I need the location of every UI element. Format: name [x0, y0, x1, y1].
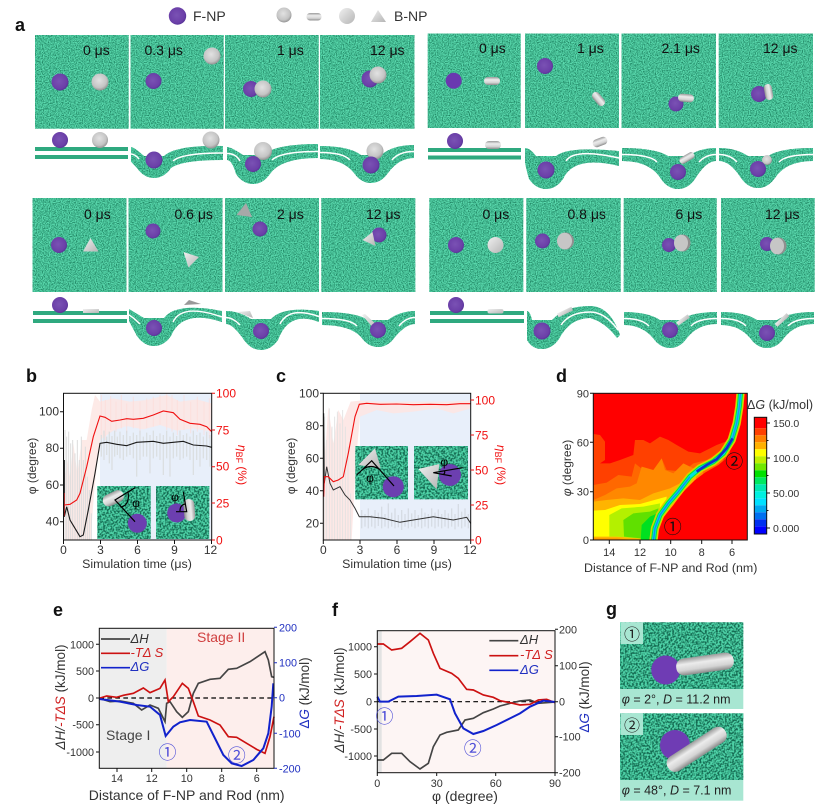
- legend: nanoparticle key: [169, 7, 427, 25]
- panel a: triangle series: 12 μs: [366, 206, 401, 222]
- chart b: phi and eta versus time: 25: [216, 496, 230, 510]
- chart c: phi and eta versus time: (%): [494, 463, 508, 485]
- panel a: rod series: 2.1 μs: [662, 40, 700, 56]
- panel a: triangle series: [32, 198, 415, 350]
- panel a: rod series: 12 μs: [763, 40, 798, 56]
- chart f: thermodynamics versus angle: -TΔ S: [520, 647, 553, 662]
- chart e: thermodynamics versus distance: 12: [146, 773, 158, 785]
- chart f: thermodynamics versus angle: ΔG (kJ/mol): [577, 661, 592, 733]
- chart f: thermodynamics versus angle: -100: [559, 732, 581, 744]
- panel a: disc series: 0.8 μs: [568, 206, 606, 222]
- chart c: phi and eta versus time: φ (degree): [284, 438, 298, 494]
- chart e: thermodynamics versus distance: 0: [279, 693, 285, 705]
- chart c: phi and eta versus time: 9: [431, 543, 438, 557]
- chart f: thermodynamics versus angle: ΔH: [519, 632, 539, 647]
- chart c: phi and eta versus time: 6: [394, 543, 401, 557]
- chart e: thermodynamics versus distance: 1000: [70, 639, 94, 651]
- chart c: phi and eta versus time: η: [494, 445, 508, 452]
- chart d: free energy contour map: 8: [699, 547, 705, 559]
- chart c: phi and eta versus time: 50: [475, 464, 489, 478]
- chart e: thermodynamics versus distance: 100: [279, 658, 297, 670]
- chart e: thermodynamics versus distance: 200: [279, 622, 297, 634]
- chart b: phi and eta versus time: 3: [97, 543, 104, 557]
- chart d: free energy contour map: 0: [583, 535, 589, 547]
- chart d: free energy contour map: [560, 388, 757, 575]
- panel a: triangle series: 2 μs: [277, 206, 304, 222]
- chart f: thermodynamics versus angle: ΔH/-TΔS (kJ/mol): [332, 647, 347, 754]
- chart f: thermodynamics versus angle: 0: [374, 778, 380, 790]
- chart e: thermodynamics versus distance: ΔH: [130, 631, 149, 646]
- panel a: sphere series: 0.3 μs: [144, 42, 183, 58]
- chart f: thermodynamics versus angle: 200: [559, 624, 577, 636]
- panel a: sphere series: 1 μs: [277, 42, 304, 58]
- chart c: phi and eta versus time: 100: [299, 386, 319, 400]
- chart c: phi and eta versus time: 75: [475, 428, 489, 442]
- panel a: disc series: 0 μs: [482, 206, 509, 222]
- snapshot: state 1: [620, 621, 743, 709]
- chart c: phi and eta versus time: 0: [475, 534, 482, 548]
- chart d: free energy contour map: ②: [725, 448, 743, 474]
- chart e: thermodynamics versus distance: ΔH/-TΔS (kJ/mol): [53, 644, 68, 751]
- chart f: thermodynamics versus angle: 0: [559, 697, 565, 709]
- chart e: thermodynamics versus distance: 0: [88, 693, 94, 705]
- chart f: thermodynamics versus angle: 60: [490, 778, 502, 790]
- chart b: phi and eta versus time: 12: [204, 543, 217, 557]
- snapshot: state 2: φ = 48°, D = 7.1 nm: [622, 784, 731, 798]
- chart b: phi and eta versus time: [25, 386, 249, 571]
- chart b: phi and eta versus time: 60: [46, 478, 59, 492]
- panel label a: a: [15, 15, 26, 35]
- legend: nanoparticle key: F-NP: [193, 8, 226, 24]
- chart b: phi and eta versus time: 80: [46, 441, 59, 455]
- panel a: sphere series: 12 μs: [370, 42, 405, 58]
- chart b: phi and eta versus time: (%): [235, 463, 249, 485]
- snapshot: state 2: ②: [624, 712, 640, 736]
- snapshot: state 2: [620, 712, 743, 801]
- chart f: thermodynamics versus angle: 90: [549, 778, 561, 790]
- chart f: thermodynamics versus angle: ②: [464, 735, 482, 761]
- colorbar: delta G scale: 150.0: [773, 418, 799, 430]
- chart e: thermodynamics versus distance: -200: [279, 763, 301, 775]
- panel a: rod series: 1 μs: [577, 40, 604, 56]
- inset: rod orientation angle, stage start: φ: [132, 496, 140, 510]
- chart c: phi and eta versus time: 80: [306, 419, 319, 433]
- colorbar: delta G scale: 0.000: [773, 523, 799, 535]
- chart e: thermodynamics versus distance: -100: [279, 728, 301, 740]
- chart e: thermodynamics versus distance: 6: [254, 773, 260, 785]
- panel a: sphere series: [35, 35, 414, 184]
- chart d: free energy contour map: Distance of F-NP and Rod (nm): [584, 561, 757, 575]
- inset: rod orientation angle, stage end: φ: [171, 490, 179, 504]
- chart f: thermodynamics versus angle: -200: [559, 768, 581, 780]
- chart c: phi and eta versus time: 40: [306, 484, 319, 498]
- chart e: thermodynamics versus distance: 14: [111, 773, 123, 785]
- panel label e: e: [53, 600, 63, 620]
- chart e: thermodynamics versus distance: ΔG (kJ/mol): [297, 657, 312, 729]
- chart e: thermodynamics versus distance: Stage II: [197, 629, 245, 645]
- chart e: thermodynamics versus distance: -500: [72, 720, 94, 732]
- chart e: thermodynamics versus distance: Distance of F-NP and Rod (nm): [89, 787, 285, 803]
- chart c: phi and eta versus time: 0: [320, 543, 327, 557]
- chart f: thermodynamics versus angle: ΔG: [519, 662, 539, 677]
- inset: triangle orientation angle, stage end: φ: [440, 455, 448, 469]
- chart e: thermodynamics versus distance: 500: [76, 666, 94, 678]
- chart b: phi and eta versus time: 50: [216, 460, 230, 474]
- chart f: thermodynamics versus angle: -1000: [344, 751, 372, 763]
- chart b: phi and eta versus time: 0: [60, 543, 67, 557]
- chart c: phi and eta versus time: 25: [475, 498, 489, 512]
- panel label d: d: [556, 366, 567, 386]
- chart d: free energy contour map: 30: [577, 486, 589, 498]
- chart c: phi and eta versus time: 3: [357, 543, 364, 557]
- inset: rod orientation angle, stage end: [156, 486, 209, 539]
- chart f: thermodynamics versus angle: ①: [376, 703, 394, 729]
- legend: nanoparticle key: B-NP: [394, 8, 427, 24]
- chart b: phi and eta versus time: 9: [171, 543, 178, 557]
- chart c: phi and eta versus time: 12: [463, 543, 477, 557]
- panel a: triangle series: 0 μs: [84, 206, 111, 222]
- chart e: thermodynamics versus distance: -1000: [66, 747, 94, 759]
- panel label b: b: [26, 366, 37, 386]
- chart e: thermodynamics versus distance: ②: [228, 742, 246, 768]
- inset: triangle orientation angle, stage end: [414, 446, 468, 499]
- panel label g: g: [606, 599, 617, 619]
- colorbar: delta G scale: 100.0: [773, 453, 799, 465]
- chart e: thermodynamics versus distance: Stage I: [106, 727, 150, 743]
- panel label c: c: [276, 366, 286, 386]
- chart f: thermodynamics versus angle: 1000: [348, 642, 372, 654]
- chart c: phi and eta versus time: [284, 386, 508, 571]
- chart c: phi and eta versus time: 100: [475, 394, 495, 408]
- colorbar: delta G scale: 50.00: [773, 488, 799, 500]
- chart c: phi and eta versus time: 60: [306, 452, 319, 466]
- chart b: phi and eta versus time: Simulation time (μs): [82, 557, 192, 571]
- chart b: phi and eta versus time: 100: [216, 386, 236, 400]
- chart b: phi and eta versus time: 0: [216, 534, 223, 548]
- chart d: free energy contour map: φ (degree): [560, 440, 574, 496]
- chart f: thermodynamics versus angle: 0: [366, 697, 372, 709]
- chart f: thermodynamics versus angle: [332, 624, 592, 804]
- chart e: thermodynamics versus distance: ①: [158, 739, 176, 765]
- panel a: disc series: 12 μs: [765, 206, 800, 222]
- panel a: rod series: 0 μs: [479, 40, 506, 56]
- panel a: triangle series: 0.6 μs: [174, 206, 213, 222]
- chart c: phi and eta versus time: 20: [306, 516, 319, 530]
- chart e: thermodynamics versus distance: -TΔ S: [130, 645, 164, 660]
- panel a: rod series: [428, 34, 813, 189]
- colorbar: delta G scale: ΔG (kJ/mol): [747, 398, 813, 412]
- chart b: phi and eta versus time: BF: [234, 452, 244, 464]
- chart b: phi and eta versus time: φ (degree): [25, 438, 39, 494]
- chart f: thermodynamics versus angle: -500: [350, 724, 372, 736]
- chart d: free energy contour map: 90: [577, 388, 589, 400]
- chart d: free energy contour map: 6: [729, 547, 735, 559]
- chart c: phi and eta versus time: Simulation time (μs): [342, 557, 452, 571]
- panel a: disc series: 6 μs: [676, 206, 702, 222]
- chart b: phi and eta versus time: η: [235, 445, 249, 452]
- snapshot: state 1: φ = 2°, D = 11.2 nm: [622, 692, 731, 706]
- chart e: thermodynamics versus distance: [53, 622, 312, 803]
- chart f: thermodynamics versus angle: 100: [559, 661, 577, 673]
- chart b: phi and eta versus time: 40: [46, 514, 59, 528]
- chart b: phi and eta versus time: 100: [39, 404, 59, 418]
- chart f: thermodynamics versus angle: 30: [431, 778, 443, 790]
- panel label f: f: [332, 600, 339, 620]
- inset: triangle orientation angle, stage start: φ: [366, 471, 374, 485]
- chart d: free energy contour map: 60: [577, 438, 589, 450]
- chart e: thermodynamics versus distance: 10: [181, 773, 193, 785]
- chart b: phi and eta versus time: 75: [216, 424, 230, 438]
- chart d: free energy contour map: 14: [603, 547, 615, 559]
- snapshot: state 1: ①: [624, 621, 640, 645]
- inset: triangle orientation angle, stage start: [355, 446, 408, 499]
- chart f: thermodynamics versus angle: φ (degree): [432, 788, 498, 804]
- panel a: disc series: [429, 198, 815, 349]
- panel a: sphere series: 0 μs: [83, 42, 110, 58]
- chart c: phi and eta versus time: BF: [493, 452, 503, 464]
- chart d: free energy contour map: 10: [665, 547, 677, 559]
- chart f: thermodynamics versus angle: 500: [354, 669, 372, 681]
- chart d: free energy contour map: 12: [634, 547, 646, 559]
- inset: rod orientation angle, stage start: [97, 486, 151, 539]
- chart e: thermodynamics versus distance: 8: [219, 773, 225, 785]
- colorbar: delta G scale: [747, 398, 813, 535]
- chart b: phi and eta versus time: 6: [134, 543, 141, 557]
- chart e: thermodynamics versus distance: ΔG: [130, 659, 149, 674]
- chart d: free energy contour map: ①: [664, 514, 682, 540]
